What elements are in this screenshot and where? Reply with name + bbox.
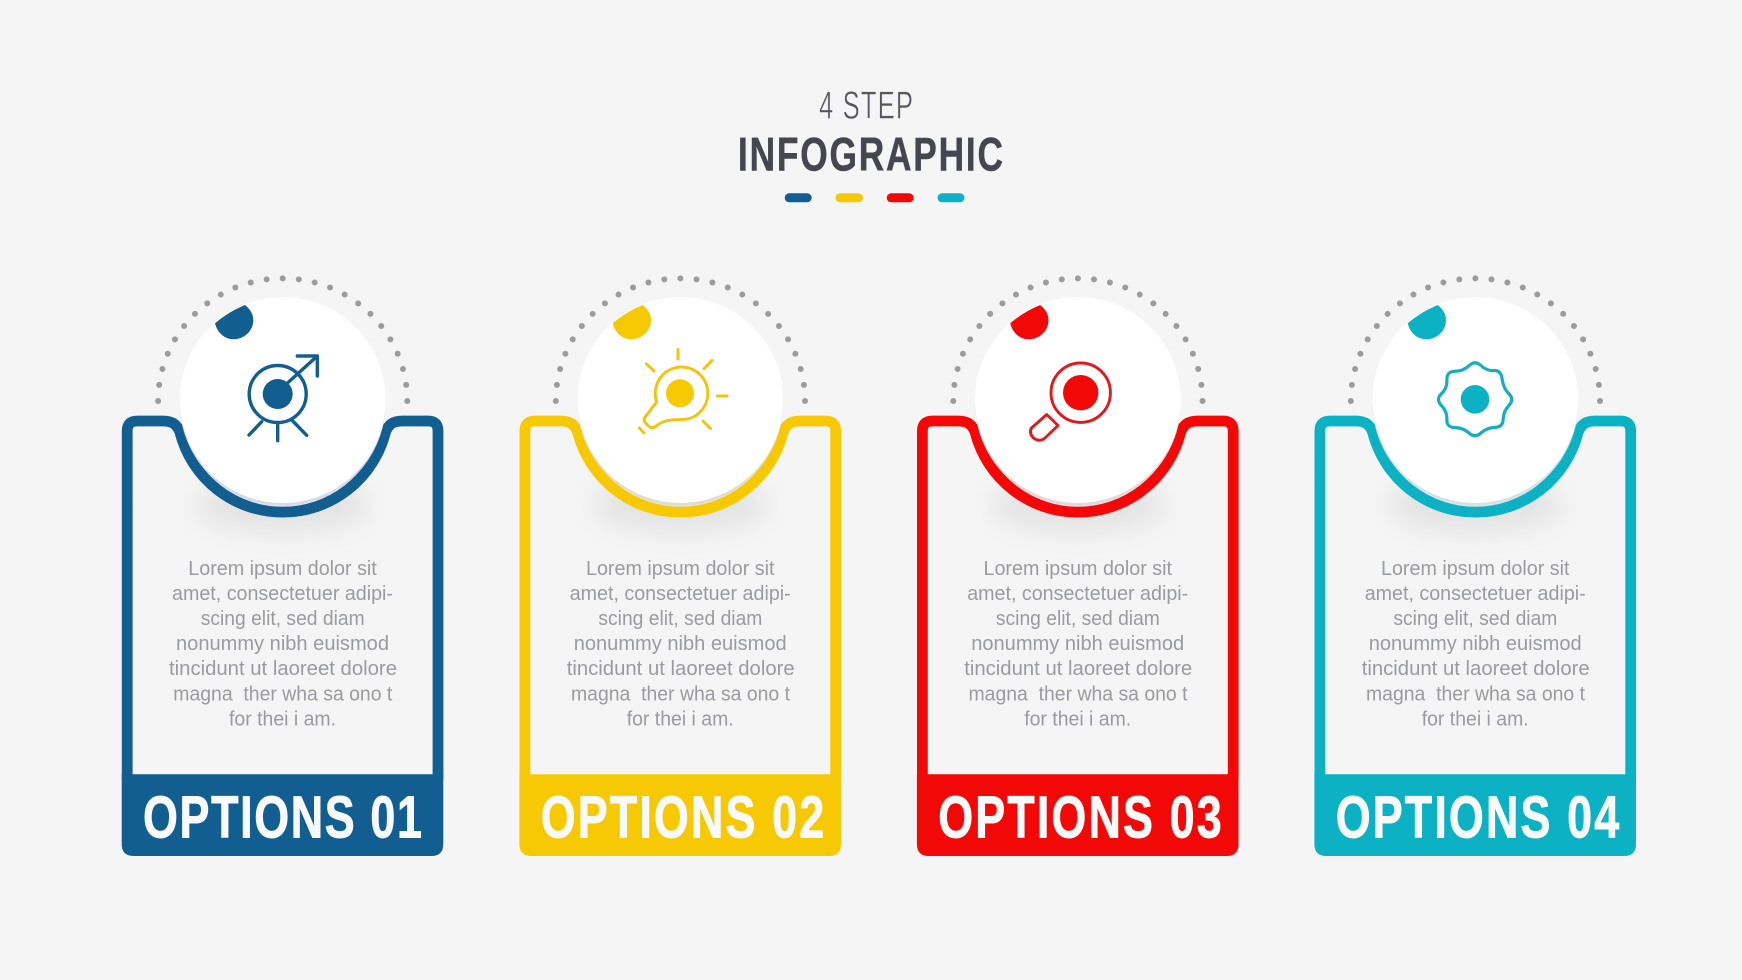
body text: Lorem ipsum dolor sit bbox=[984, 557, 1172, 580]
body text: tincidunt ut laoreet dolore bbox=[964, 657, 1192, 680]
body text: amet, consectetuer adipi- bbox=[1365, 582, 1586, 605]
heading: 4 STEP: 4 STEP bbox=[819, 83, 913, 127]
option label: OPTIONS 02 bbox=[541, 786, 824, 851]
icon: gear bbox=[1438, 363, 1512, 436]
dotted arc bbox=[953, 278, 1202, 401]
body text: amet, consectetuer adipi- bbox=[172, 582, 393, 605]
body text: tincidunt ut laoreet dolore bbox=[567, 657, 795, 680]
panel: options 01 bbox=[122, 278, 443, 856]
panel: options 02 bbox=[519, 278, 841, 856]
colour key pills bbox=[785, 193, 964, 202]
body text: scing elit, sed diam bbox=[598, 607, 762, 630]
option label: OPTIONS 03 bbox=[938, 786, 1222, 851]
body text: nonummy nibh euismod bbox=[176, 632, 389, 655]
body text bbox=[169, 557, 397, 730]
body text: magna ther wha sa ono t bbox=[1366, 682, 1585, 706]
white circle bbox=[1372, 297, 1578, 506]
option band bbox=[1314, 774, 1636, 856]
body text: for thei i am. bbox=[1024, 708, 1131, 730]
option band bbox=[917, 774, 1238, 856]
body text: Lorem ipsum dolor sit bbox=[586, 557, 775, 580]
body text: nonummy nibh euismod bbox=[574, 632, 787, 655]
dotted arc bbox=[556, 278, 805, 401]
badge bbox=[613, 305, 651, 339]
body text: nonummy nibh euismod bbox=[1369, 632, 1582, 655]
body text: Lorem ipsum dolor sit bbox=[1381, 557, 1570, 580]
body text: for thei i am. bbox=[627, 708, 734, 730]
dotted arc bbox=[158, 278, 407, 401]
body text bbox=[1362, 557, 1590, 730]
badge bbox=[1408, 305, 1446, 339]
body text: amet, consectetuer adipi- bbox=[570, 582, 791, 605]
panel: options 03 bbox=[917, 278, 1238, 856]
card frame bbox=[922, 421, 1233, 780]
body text: magna ther wha sa ono t bbox=[173, 682, 393, 706]
option label: OPTIONS 04 bbox=[1336, 786, 1619, 851]
option label: OPTIONS 01 bbox=[143, 786, 422, 851]
body text: Lorem ipsum dolor sit bbox=[188, 557, 377, 580]
icon: magnifier bbox=[1030, 363, 1110, 440]
body text bbox=[964, 557, 1192, 730]
body text bbox=[567, 557, 795, 730]
panel: options 04 bbox=[1314, 278, 1636, 856]
body text: tincidunt ut laoreet dolore bbox=[169, 657, 397, 680]
body text: scing elit, sed diam bbox=[1393, 607, 1557, 630]
badge bbox=[1010, 305, 1048, 339]
title bbox=[738, 83, 1003, 202]
body text: for thei i am. bbox=[229, 708, 336, 730]
icon: light bulb bbox=[640, 350, 727, 433]
white circle bbox=[975, 297, 1181, 506]
body text: for thei i am. bbox=[1422, 708, 1529, 730]
dotted arc bbox=[1351, 278, 1600, 401]
body text: magna ther wha sa ono t bbox=[969, 682, 1188, 706]
body text: scing elit, sed diam bbox=[996, 607, 1160, 630]
option band bbox=[122, 774, 443, 856]
card frame bbox=[127, 421, 438, 780]
white circle bbox=[180, 297, 386, 506]
body text: scing elit, sed diam bbox=[201, 607, 365, 630]
white circle bbox=[577, 297, 783, 506]
option band bbox=[519, 774, 841, 856]
icon: target arrow bbox=[249, 356, 317, 441]
body text: amet, consectetuer adipi- bbox=[967, 582, 1188, 605]
body text: magna ther wha sa ono t bbox=[571, 682, 790, 706]
card frame bbox=[1320, 421, 1631, 780]
badge bbox=[215, 305, 253, 339]
heading: INFOGRAPHIC: INFOGRAPHIC bbox=[738, 128, 1003, 181]
card frame bbox=[525, 421, 836, 780]
body text: tincidunt ut laoreet dolore bbox=[1362, 657, 1590, 680]
body text: nonummy nibh euismod bbox=[971, 632, 1184, 655]
